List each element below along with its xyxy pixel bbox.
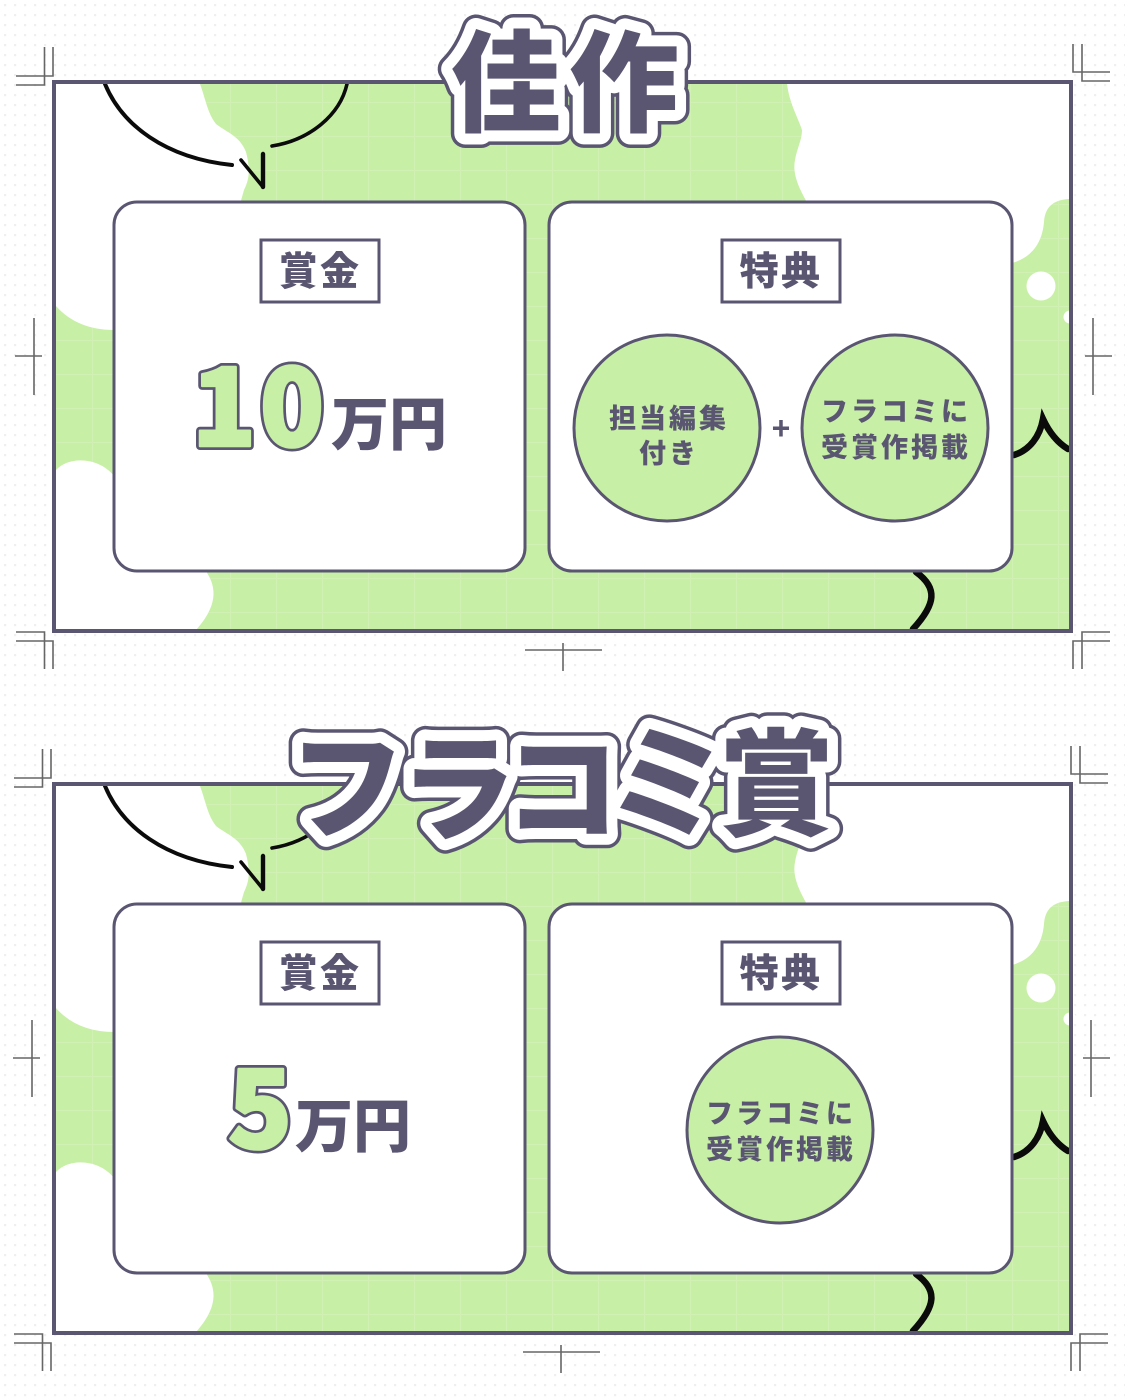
card: benefits — [549, 202, 1012, 571]
panel background with green blob and speech-bubble strokes — [54, 82, 1076, 631]
crop marks — [13, 746, 1110, 1373]
label: 特典: 特典 — [740, 251, 822, 294]
amount: 10万円: 10 — [192, 323, 324, 477]
label: 賞金 — [261, 240, 379, 302]
circle: published on Furakomi: フラコミに — [706, 1099, 856, 1129]
panel: 佳作 — [15, 24, 1112, 671]
panel background with green blob and speech-bubble strokes — [54, 784, 1076, 1333]
panel: フラコミ賞 — [13, 712, 1110, 1373]
title: 佳作: 佳作 — [451, 24, 679, 147]
card: prize money — [114, 202, 525, 571]
card: benefits — [549, 904, 1012, 1273]
amount: 5万円 — [228, 1025, 411, 1179]
circle: assigned editor: 付き — [639, 439, 699, 469]
amount: 10万円: 10 — [192, 323, 324, 477]
title: 佳作: 佳作 — [451, 24, 679, 147]
label: 特典 — [722, 240, 840, 302]
circle: assigned editor: 担当編集 — [609, 404, 729, 434]
title: フラコミ賞: フラコミ賞 — [289, 712, 834, 857]
label: 賞金 — [261, 942, 379, 1004]
circle: published on Furakomi: 受賞作掲載 — [706, 1135, 856, 1165]
label: 特典 — [722, 942, 840, 1004]
amount: 10万円: 万円 — [331, 393, 447, 458]
circle: published on Furakomi: フラコミに — [821, 397, 971, 427]
label: 特典: 特典 — [740, 953, 822, 996]
amount: 5万円: 5 — [228, 1025, 292, 1179]
circle: published on Furakomi — [802, 335, 988, 521]
label: 賞金: 賞金 — [279, 251, 361, 294]
circle: published on Furakomi — [687, 1037, 873, 1223]
amount: 5万円: 万円 — [295, 1095, 411, 1160]
plus sign: + — [772, 410, 790, 446]
amount: 5万円: 5 — [228, 1025, 292, 1179]
card: prize money — [114, 904, 525, 1273]
circle: published on Furakomi: 受賞作掲載 — [821, 433, 971, 463]
label: 賞金: 賞金 — [279, 953, 361, 996]
circle: assigned editor — [574, 335, 760, 521]
crop marks — [15, 44, 1112, 671]
title: フラコミ賞: フラコミ賞 — [289, 712, 834, 857]
amount: 10万円 — [192, 323, 447, 477]
